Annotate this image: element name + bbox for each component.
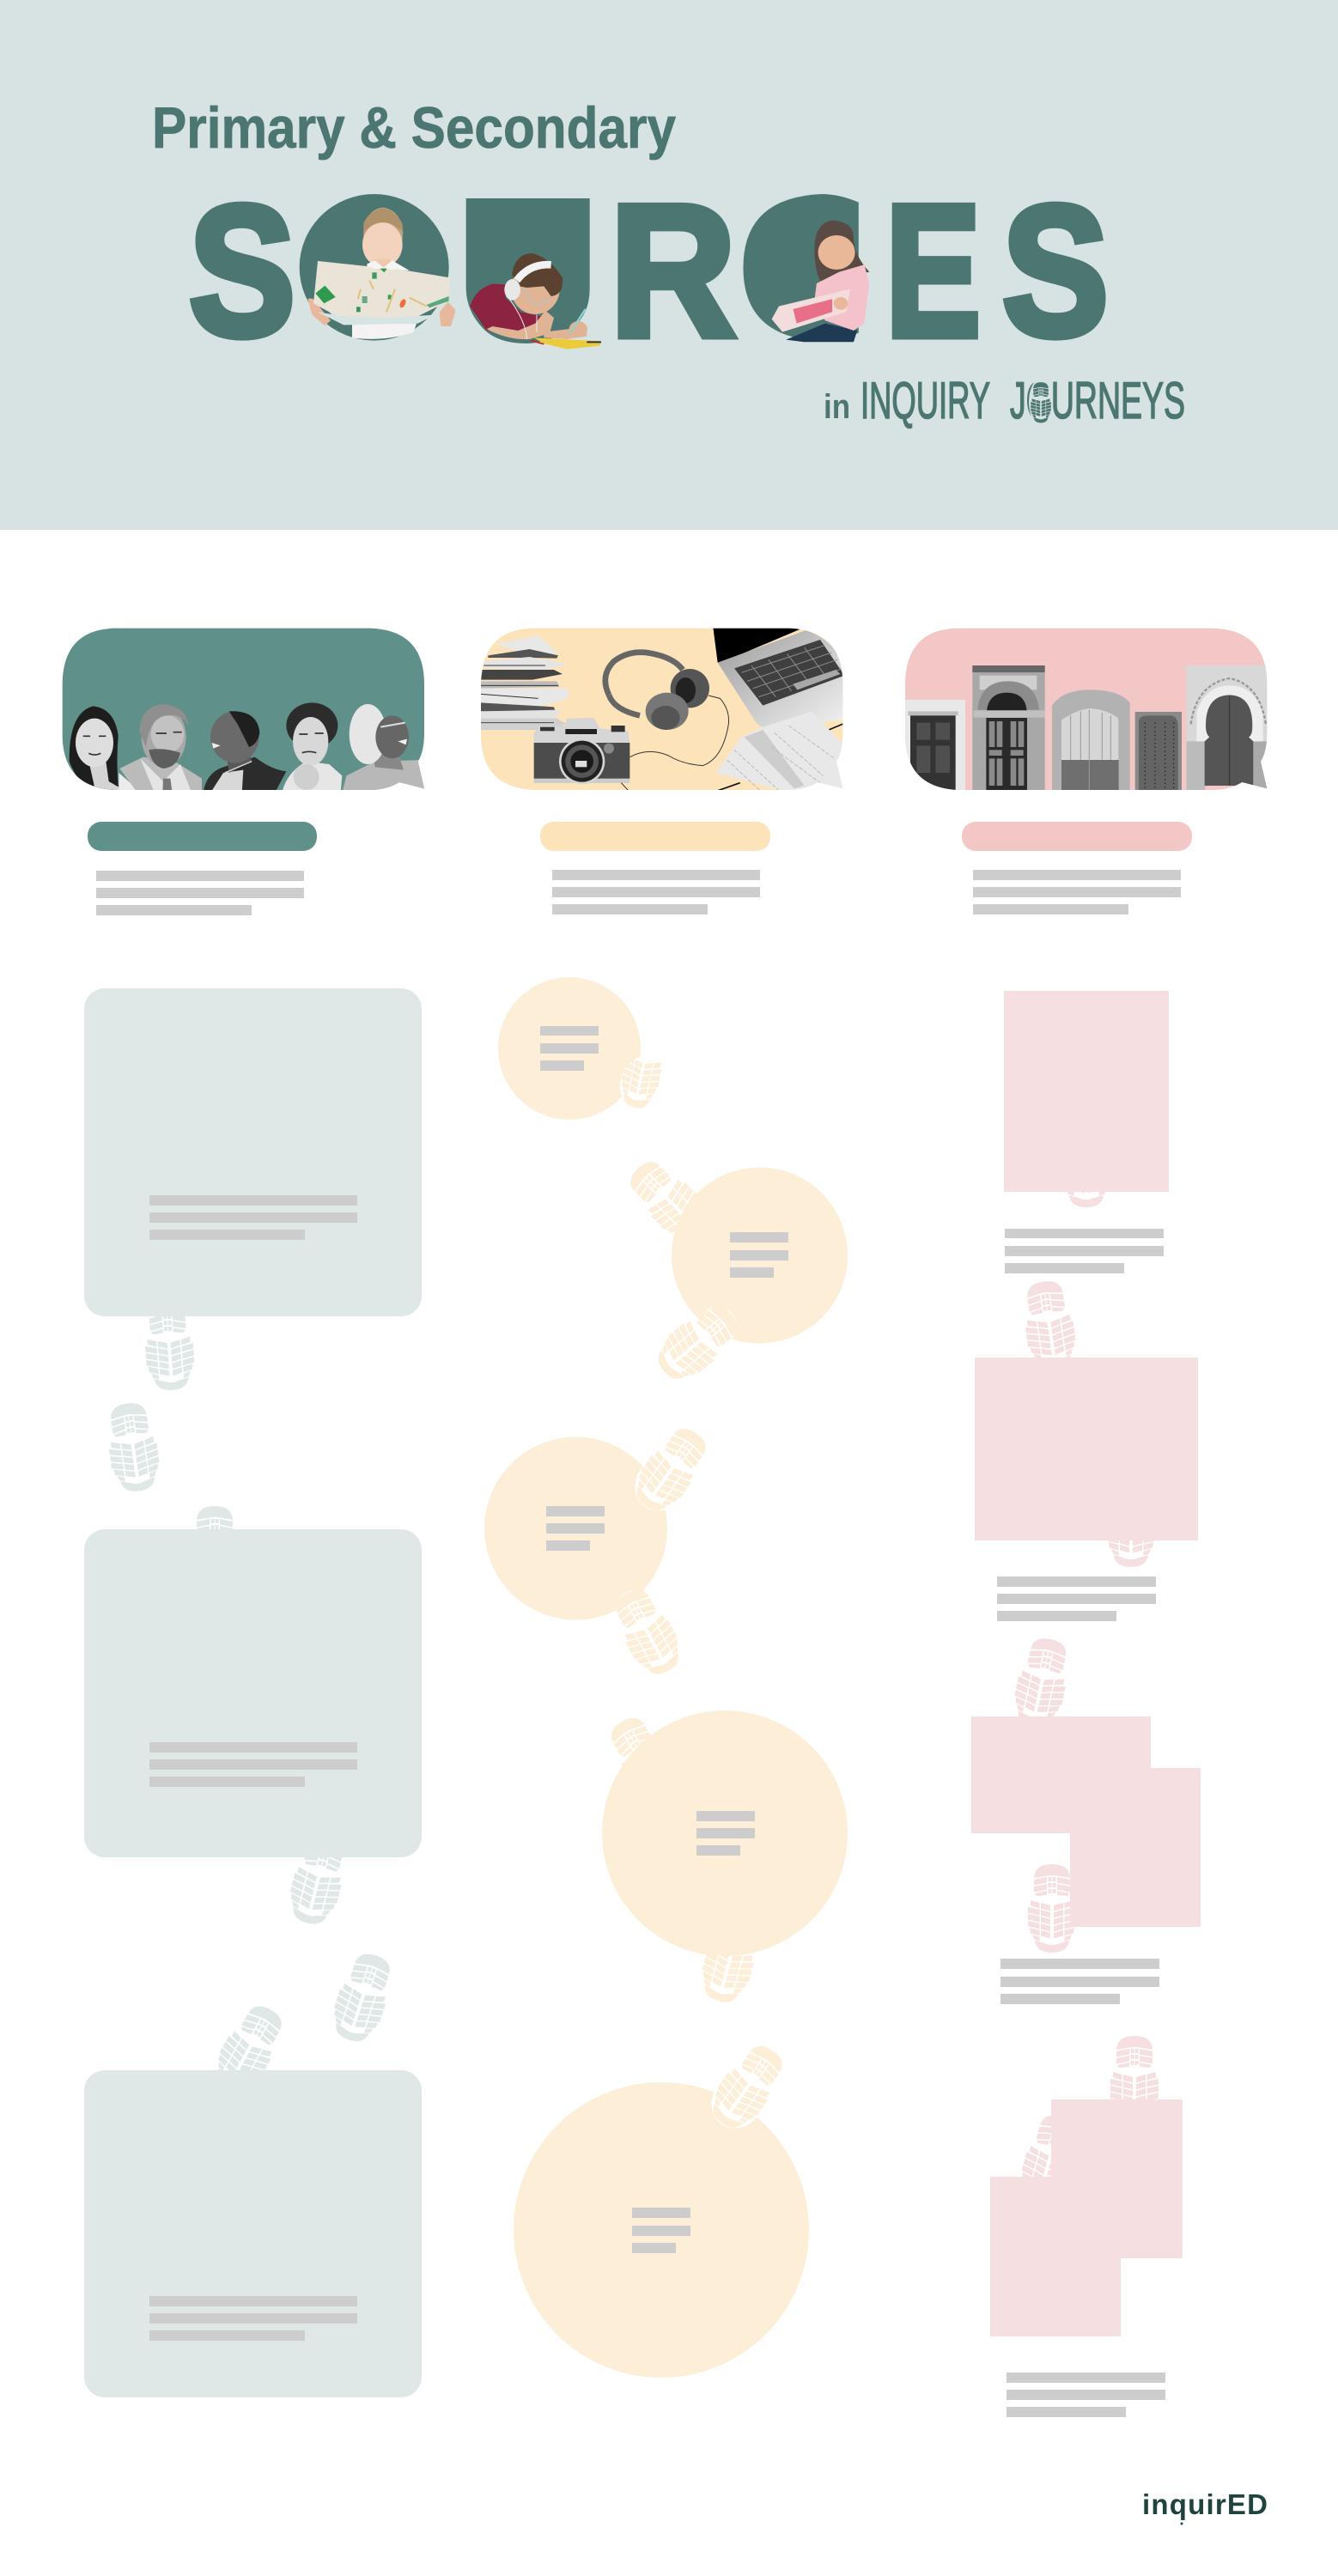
door 4 xyxy=(1135,712,1182,793)
letter E: E xyxy=(885,167,981,376)
footprint m8 xyxy=(701,2036,794,2138)
word INQUIRY: INQUIRY xyxy=(861,372,990,429)
circle 1 xyxy=(498,977,641,1120)
letter O, U and C base text: O xyxy=(339,198,410,341)
child with headphones xyxy=(470,253,601,349)
panel: right image pair 3 xyxy=(971,1716,1201,1927)
photo: five people xyxy=(70,702,424,793)
text placeholder: column 2 intro xyxy=(552,870,760,914)
person 5 xyxy=(342,704,424,793)
icon: boot print as letter O xyxy=(1029,379,1053,425)
photo letters O and U xyxy=(300,194,601,349)
door 2 xyxy=(972,665,1045,793)
panel: left card 2 xyxy=(84,1529,422,1857)
panel: right image pair 4 xyxy=(990,2099,1183,2336)
footprints: middle trail over circles xyxy=(605,1054,794,2138)
text placeholder xyxy=(149,1742,357,1787)
camera xyxy=(534,718,629,784)
letter O, U and C base text: C xyxy=(762,198,827,341)
text placeholder xyxy=(149,2296,357,2341)
footprint p5 xyxy=(1028,1864,1076,1953)
footprint p7 xyxy=(1015,2111,1085,2208)
footprint m4 xyxy=(624,1419,717,1521)
letter O, U and C base text xyxy=(339,177,827,341)
footprint p1 xyxy=(1062,1119,1110,1207)
footprint m1 xyxy=(616,1054,664,1112)
footprint m2 xyxy=(620,1151,717,1249)
footprint m3 xyxy=(648,1295,748,1391)
text placeholder xyxy=(632,2208,690,2253)
footprint 6 xyxy=(207,1998,292,2099)
U shape xyxy=(466,198,590,343)
word JOURNEYS: JOURNEYS xyxy=(1010,372,1185,429)
door 3 xyxy=(1052,690,1130,793)
circle 3 xyxy=(484,1437,667,1619)
footprint m6 xyxy=(601,1710,687,1810)
footprint m5 xyxy=(605,1581,690,1684)
door 1 xyxy=(903,700,965,793)
text placeholder: right 1 xyxy=(1005,1229,1164,1273)
title: Primary & Secondary: Primary & Secondary xyxy=(152,95,676,161)
panel: media header card xyxy=(481,628,846,793)
text placeholder xyxy=(696,1811,755,1856)
person 1 xyxy=(70,706,140,793)
text placeholder xyxy=(149,1195,357,1240)
person 4 xyxy=(282,702,342,793)
text placeholder: right 3 xyxy=(1000,1959,1159,2004)
word in: in xyxy=(824,388,850,426)
O shape xyxy=(300,194,449,341)
headphones xyxy=(605,653,709,730)
photo: row of doors xyxy=(903,665,1268,793)
text placeholder: right 4 xyxy=(1007,2372,1165,2417)
logo: inquirED: inquirED xyxy=(1142,2488,1268,2520)
label bar: secondary media xyxy=(540,822,770,851)
text placeholder xyxy=(546,1506,605,1551)
footprints: right trail xyxy=(1009,1119,1159,2208)
text placeholder xyxy=(730,1232,788,1278)
child with book xyxy=(772,221,869,342)
maps xyxy=(715,711,846,793)
panel: left card 1 xyxy=(84,988,422,1316)
footprint p6 xyxy=(1110,2036,1159,2124)
footprint 5 xyxy=(326,1948,399,2047)
panel: right image 2 xyxy=(975,1358,1198,1540)
text placeholder: column 1 intro xyxy=(96,871,304,915)
photo: books, camera, headphones, laptop, maps xyxy=(481,628,846,793)
child with map xyxy=(307,208,456,339)
footprint p3 xyxy=(1107,1479,1155,1567)
footprint 4 xyxy=(283,1832,352,1929)
circle 4 xyxy=(602,1710,848,1956)
footprint 3 xyxy=(191,1506,239,1595)
footprint m7 xyxy=(696,1910,765,2008)
letter S: S xyxy=(189,167,295,374)
circle 2 xyxy=(672,1168,848,1343)
letter S end: S xyxy=(1002,167,1109,374)
text placeholder xyxy=(540,1026,599,1071)
letter R: R xyxy=(610,166,736,376)
cable xyxy=(621,696,729,791)
panel: left card 3 xyxy=(84,2070,422,2397)
footprint 1 xyxy=(142,1300,196,1392)
footprint 2 xyxy=(103,1400,163,1494)
text placeholder: right 2 xyxy=(997,1577,1156,1621)
footprint p2 xyxy=(1019,1279,1080,1372)
letter O, U and C base text: U xyxy=(496,177,561,319)
person 2 xyxy=(119,704,202,793)
title: SOURCES with children photos in letters xyxy=(189,166,1109,376)
circle 5 xyxy=(514,2082,809,2378)
label bar: places xyxy=(962,822,1192,851)
text placeholder: column 3 intro xyxy=(973,870,1181,914)
panel: doors header card xyxy=(903,629,1268,793)
stack of books xyxy=(481,635,569,730)
panel: people header card xyxy=(63,629,424,793)
footprint p4 xyxy=(1009,1634,1074,1731)
laptop xyxy=(713,628,846,730)
photo letter C xyxy=(743,194,869,342)
door 5 xyxy=(1187,665,1268,793)
subtitle: in Inquiry Journeys xyxy=(824,372,1185,429)
panel: right image 1 xyxy=(1004,991,1169,1192)
header banner xyxy=(0,0,1338,530)
footprints: left trail xyxy=(103,1300,399,2099)
person 3 xyxy=(204,711,286,793)
footprints: middle trail under circles xyxy=(601,1151,765,2008)
label bar: primary sources xyxy=(88,822,317,851)
C shape xyxy=(743,194,859,341)
